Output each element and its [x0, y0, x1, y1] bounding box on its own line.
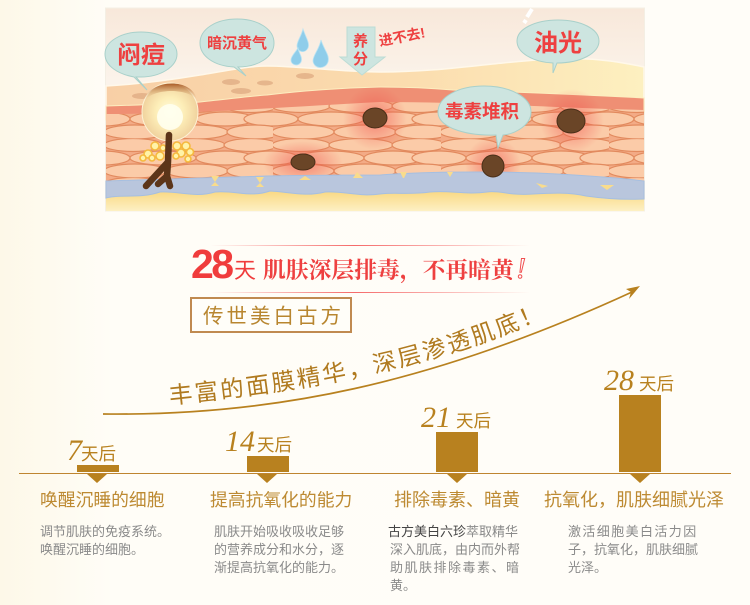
column: 7 days [40, 434, 170, 557]
label 21天后: 天后 [456, 411, 491, 431]
bubble: 闷痘: 闷痘 [117, 42, 165, 69]
skin surface layer [106, 59, 644, 110]
bar [247, 456, 289, 472]
column heading: 唤醒沉睡的细胞 [40, 490, 165, 510]
column text [40, 524, 170, 557]
bar [619, 395, 661, 472]
yellow gaps in basal layer [211, 172, 614, 190]
dark toxin spots [291, 108, 585, 177]
cell tissue [106, 102, 644, 180]
arrow: 养分: 分 [353, 51, 368, 68]
column heading: 提高抗氧化的能力 [210, 490, 352, 510]
icon: pimple with hair [140, 83, 198, 186]
bar [436, 432, 478, 472]
column text [388, 524, 521, 593]
bubble: 闷痘 [105, 32, 177, 90]
label 7天后: 7 [67, 434, 84, 467]
heading rule top [210, 245, 530, 246]
column: 21 days [388, 401, 521, 593]
label 14天后: 14 [225, 425, 255, 458]
blue basal cell layer [106, 172, 644, 199]
column: 28 days [544, 364, 724, 575]
column: 14 days [210, 425, 352, 575]
heading: 28天: 肌肤深层排毒，不再暗黄 [263, 258, 517, 284]
heading: 28天: 28 [191, 241, 233, 287]
icon: water drops [291, 29, 328, 68]
column text: 深入肌底，由内而外帮 [390, 542, 520, 557]
red inflammation glows [263, 86, 604, 193]
label box: 传世美白古方 [191, 298, 351, 332]
pointer [87, 474, 107, 483]
heading: 28天 [191, 241, 526, 287]
column text: 古方美白六珍萃取精华 [388, 524, 518, 539]
column text: 子，抗氧化，肌肤细腻 [568, 542, 698, 557]
fat globules [140, 142, 194, 162]
label 28天后 [604, 364, 674, 397]
column text: 肌肤开始吸收吸收足够 [214, 524, 344, 539]
growth arrow [103, 286, 640, 414]
highlight dashes [524, 9, 532, 23]
bubble: 暗沉黄气 [200, 19, 274, 76]
bubble: 毒素堆积 [438, 86, 531, 148]
label 7天后 [67, 434, 116, 467]
dark blotches [132, 73, 314, 99]
column text: 光泽。 [568, 560, 607, 575]
panel: skin illustration [105, 8, 644, 211]
column text: 激活细胞美白活力因 [568, 524, 698, 539]
column text: 黄。 [390, 578, 416, 593]
arrow: 养分 [340, 27, 385, 75]
column text: 的营养成分和水分，逐 [214, 542, 344, 557]
callout: 进不去: 进不去! [378, 24, 426, 49]
column heading: 抗氧化，肌肤细腻光泽 [544, 490, 724, 510]
pointer [630, 474, 650, 483]
label 7天后: 天后 [81, 444, 116, 464]
red dermis band [106, 87, 644, 120]
column text: 唤醒沉睡的细胞。 [40, 542, 144, 557]
bubble: 暗沉黄气: 暗沉黄气 [207, 34, 267, 52]
curved slogan: 丰富的面膜精华，深层渗透肌底！ [170, 308, 530, 405]
column text: 助肌肤排除毒素、暗 [390, 560, 521, 575]
label 14天后 [225, 425, 292, 458]
column text [568, 524, 698, 575]
column text: 调节肌肤的免疫系统。 [40, 524, 170, 539]
fat layer [106, 190, 644, 211]
bubble: 油光: 油光 [534, 30, 582, 57]
arrow: 养分: 养 [353, 32, 368, 50]
heading: 28天: ! [516, 252, 526, 285]
column text: 渐提高抗氧化的能力。 [214, 560, 344, 575]
pointer [447, 474, 467, 483]
heading: 28天: 天 [234, 258, 256, 283]
timeline axis [19, 473, 731, 474]
bar [77, 465, 119, 472]
label box: 传世美白古方: 传世美白古方 [203, 305, 344, 328]
label 21天后: 21 [421, 401, 451, 434]
bubble: 油光 [517, 20, 599, 73]
bubble: 毒素堆积: 毒素堆积 [445, 101, 519, 122]
column heading: 排除毒素、暗黄 [394, 490, 520, 510]
heading rule bottom [210, 292, 530, 293]
pointer [257, 474, 277, 483]
label 21天后 [421, 401, 491, 434]
label 14天后: 天后 [257, 435, 292, 455]
label 28天后: 天后 [639, 374, 674, 394]
column text [214, 524, 344, 575]
label 28天后: 28 [604, 364, 634, 397]
